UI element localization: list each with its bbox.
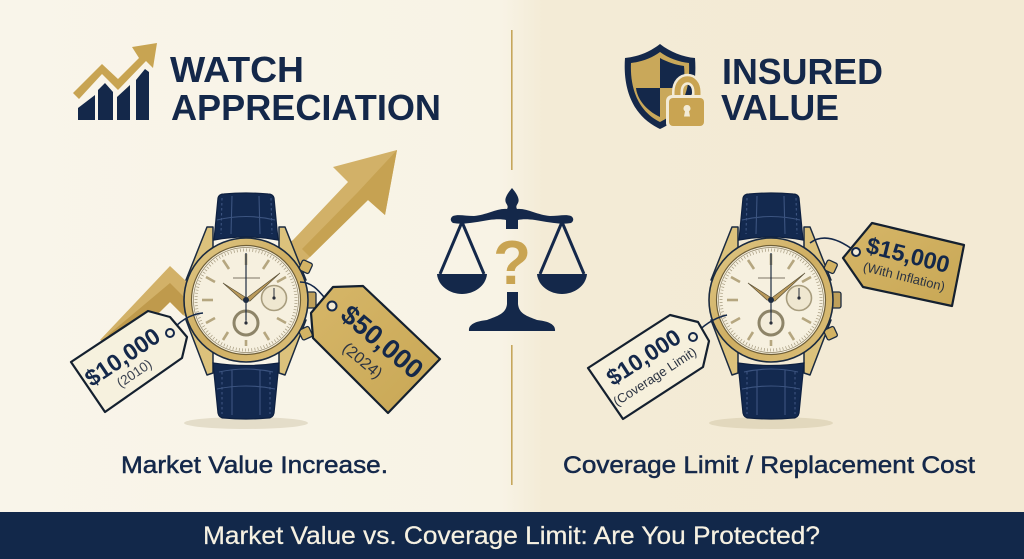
heading: watch appreciation xyxy=(170,49,441,128)
price tag: coverage limit: (Coverage Limit) xyxy=(610,344,699,409)
heading: watch appreciation: WATCH xyxy=(170,49,304,90)
icon: scales of justice xyxy=(437,188,587,331)
footer text: Market Value vs. Coverage Limit: Are You Protected? xyxy=(203,522,820,550)
price tag: with inflation xyxy=(810,223,964,306)
price tag: 2024: (2024) xyxy=(339,340,385,383)
heading: insured value: VALUE xyxy=(721,87,839,128)
caption: coverage limit / replacement cost: Coverage Limit / Replacement Cost xyxy=(563,452,975,479)
center divider top xyxy=(511,30,513,170)
price tag: 2010: (2010) xyxy=(114,356,155,391)
center divider bottom xyxy=(511,345,513,485)
price tag: 2010 xyxy=(71,311,203,412)
panel: insured value xyxy=(563,44,975,479)
icon: growth chart with arrow xyxy=(73,43,157,120)
price tag: 2024 xyxy=(300,282,440,413)
price tag: with inflation: $15,000 xyxy=(864,232,952,278)
price tag: coverage limit xyxy=(588,315,727,419)
shadow under right watch xyxy=(709,417,833,429)
left watch xyxy=(184,193,316,419)
price tag: 2024: $50,000 xyxy=(335,299,429,385)
price tag: 2010: $10,000 xyxy=(80,323,165,392)
heading: watch appreciation: APPRECIATION xyxy=(171,87,441,128)
caption: market value increase: Market Value Increase. xyxy=(121,452,388,479)
footer banner xyxy=(0,512,1024,559)
shadow under left watch xyxy=(184,417,308,429)
arrow: rising value xyxy=(100,150,397,350)
price tag: with inflation: (With Inflation) xyxy=(862,259,947,294)
icon: question mark: ? xyxy=(493,229,531,298)
right watch xyxy=(709,193,841,419)
panel: watch appreciation xyxy=(71,43,441,479)
price tag: coverage limit: $10,000 xyxy=(602,324,685,391)
heading: insured value xyxy=(721,51,883,128)
icon: shield with padlock xyxy=(625,44,707,129)
heading: insured value: INSURED xyxy=(722,51,883,92)
